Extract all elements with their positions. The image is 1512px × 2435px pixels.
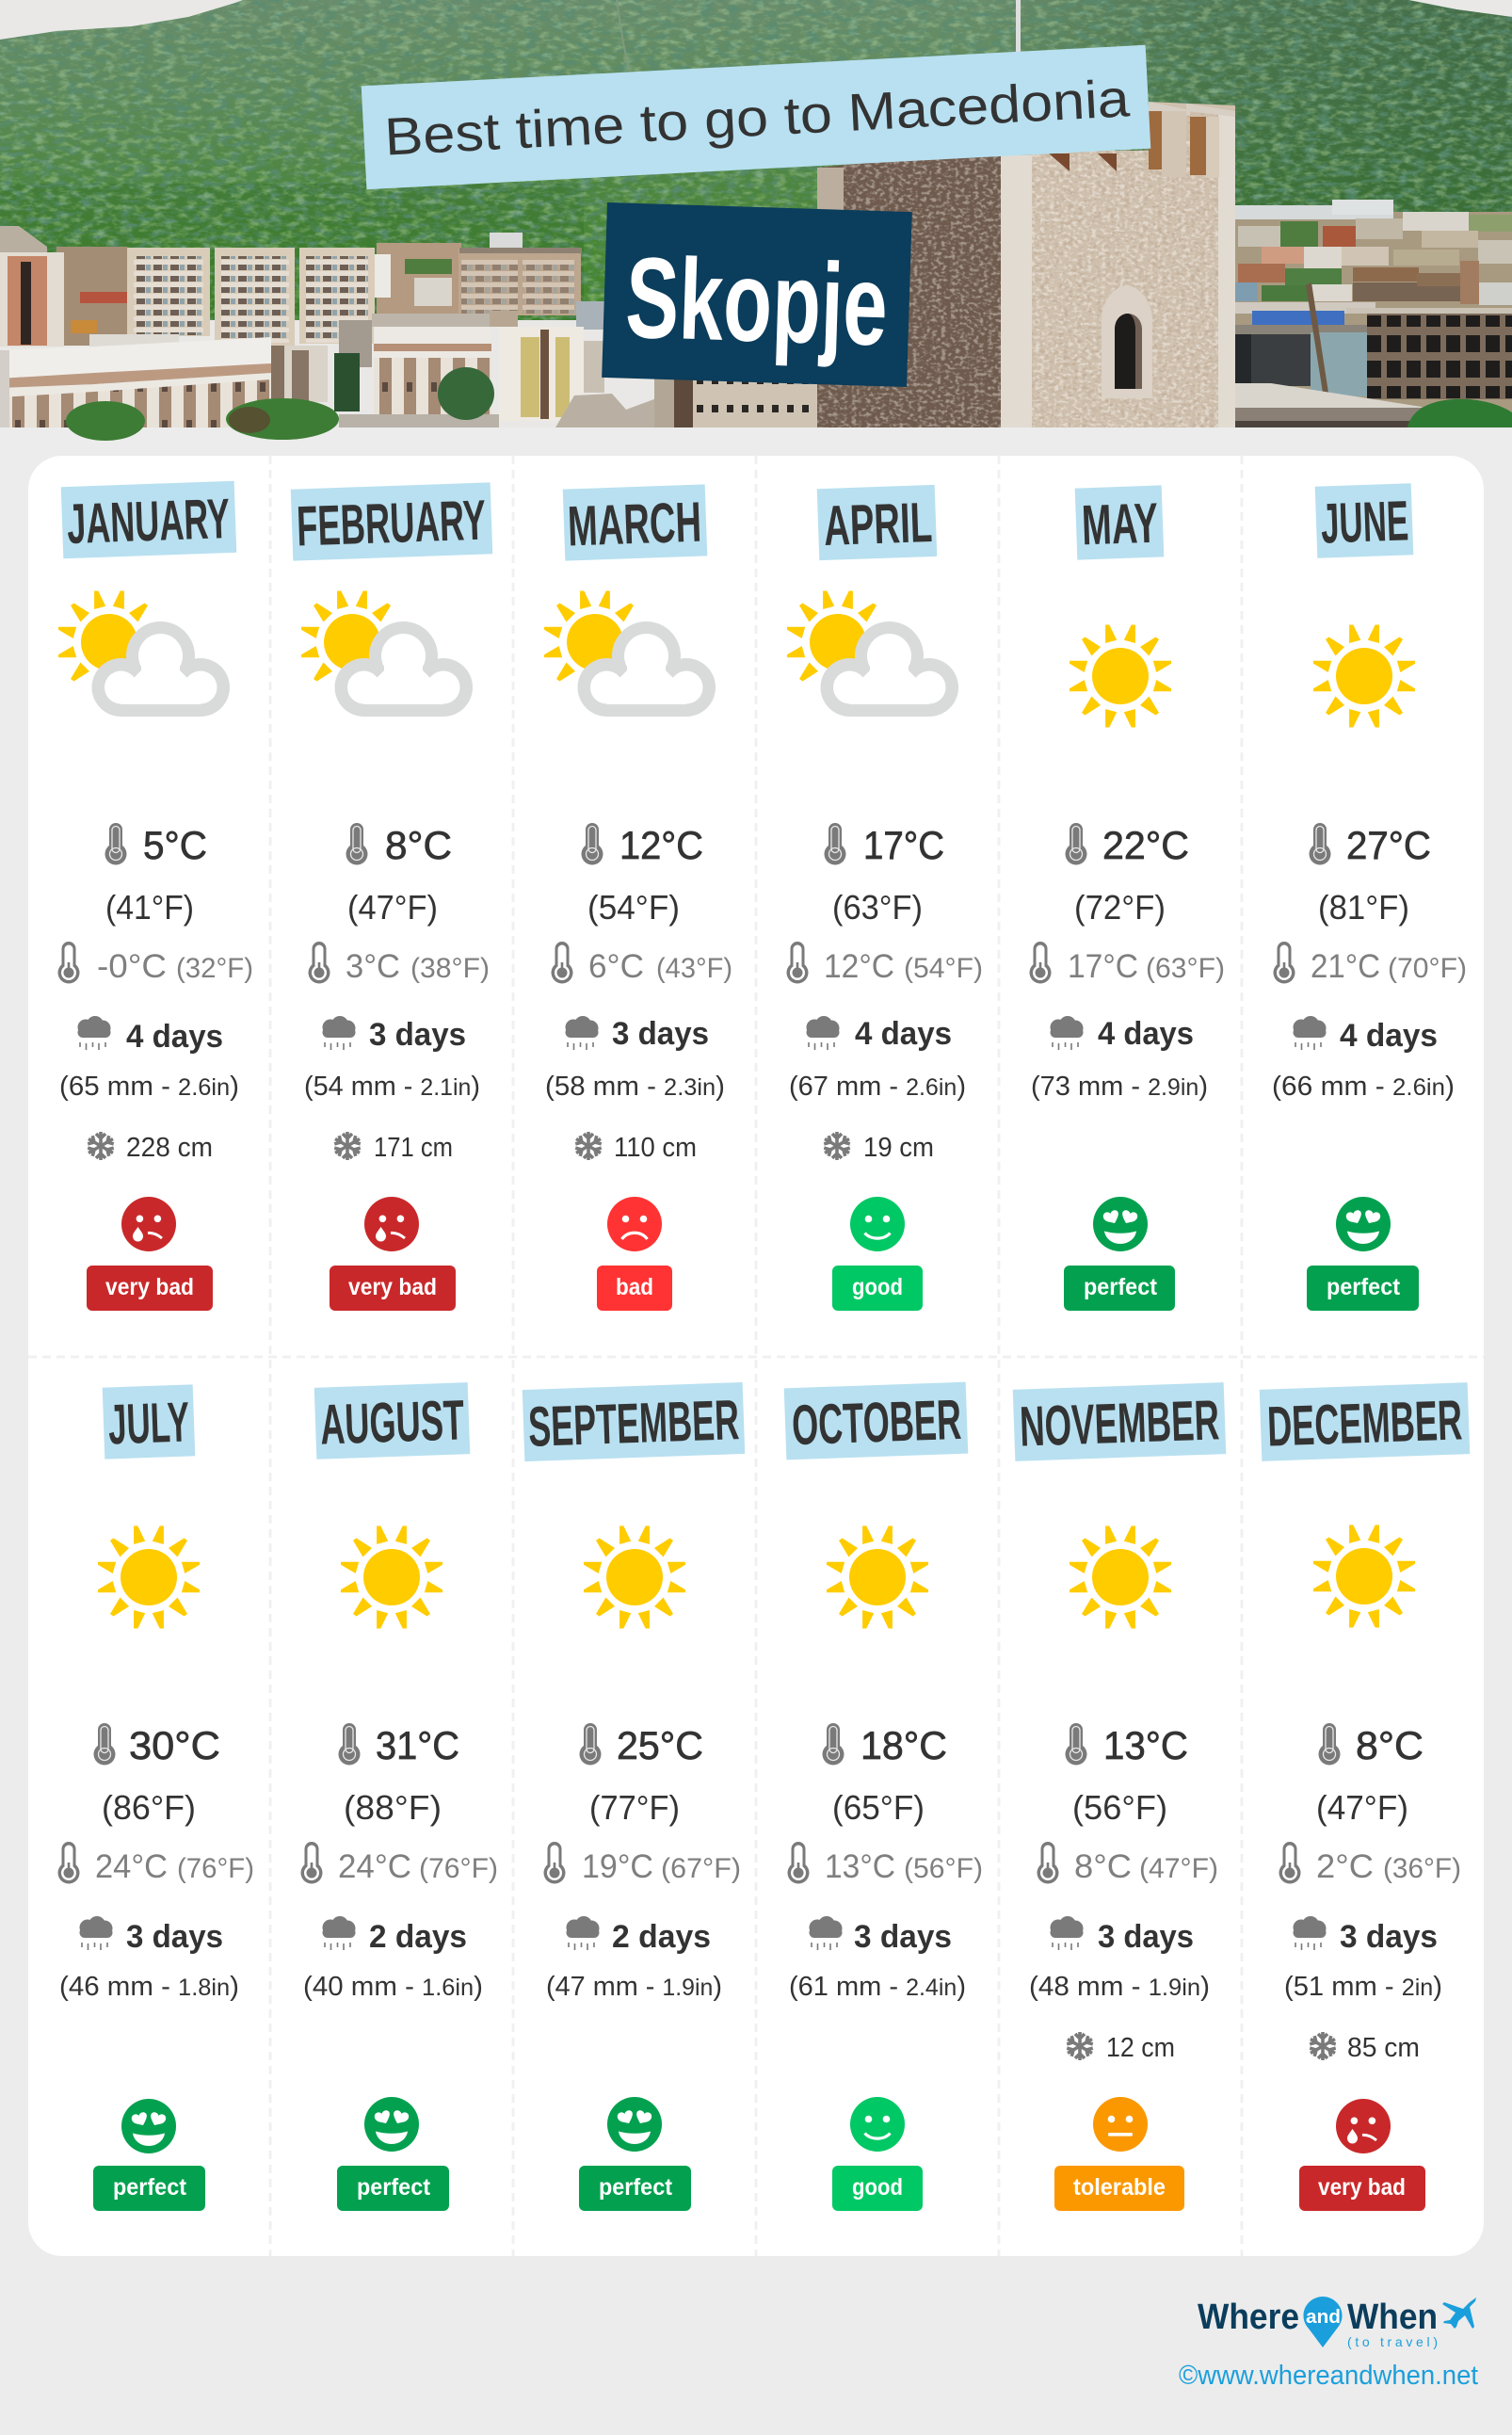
icon: thermometer — [582, 823, 603, 864]
panel: March — [544, 484, 732, 1311]
icon: low thermometer — [1037, 1842, 1058, 1883]
month label — [103, 1384, 195, 1459]
icon: thermometer — [825, 823, 845, 864]
rainfall: (73 mm - 2.9in) — [1031, 1072, 1208, 1102]
icon: low thermometer — [1279, 1842, 1301, 1883]
icon: plane — [1442, 2298, 1476, 2329]
low temperature: 8°C — [1074, 1848, 1132, 1885]
rating: good: good — [852, 2174, 903, 2201]
main card — [28, 456, 1484, 2256]
month label — [523, 1382, 745, 1461]
high temperature fahrenheit: (56°F) — [1072, 1788, 1167, 1827]
rainfall: (65 mm - 2.6in) — [59, 1072, 239, 1102]
high temperature: 31°C — [376, 1723, 459, 1767]
high temperature: 13°C — [1103, 1723, 1188, 1767]
icon: thermometer — [580, 1723, 601, 1765]
icon: low thermometer — [309, 942, 330, 983]
icon: sun — [98, 1525, 200, 1629]
logo: Where and When: Where — [1198, 2298, 1299, 2337]
icon: map pin — [1303, 2297, 1343, 2347]
snowfall: 19 cm — [863, 1133, 934, 1163]
rainfall: (47 mm - 1.9in) — [546, 1972, 722, 2002]
snowfall: 85 cm — [1347, 2033, 1420, 2063]
high temperature: 17°C — [863, 823, 944, 867]
rating: very bad — [87, 1266, 213, 1311]
logo: Where and When: (to travel) — [1347, 2334, 1438, 2349]
title banner — [362, 45, 1150, 189]
month label — [291, 482, 492, 561]
low temperature: 13°C — [825, 1848, 895, 1885]
rating: perfect: perfect — [113, 2174, 187, 2201]
rating: perfect: perfect — [357, 2174, 431, 2201]
low temperature: 6°C — [588, 948, 644, 985]
icon: snow — [1309, 2032, 1337, 2060]
high temperature fahrenheit: (81°F) — [1318, 888, 1409, 927]
panel: August — [301, 1382, 498, 2211]
icon: good face — [850, 2097, 905, 2152]
month label: NOVEMBER — [1019, 1388, 1220, 1459]
low temperature: 19°C — [582, 1848, 653, 1885]
high temperature fahrenheit: (77°F) — [589, 1788, 680, 1827]
high temperature fahrenheit: (65°F) — [832, 1788, 925, 1827]
month label: SEPTEMBER — [527, 1388, 740, 1459]
panel: October — [784, 1382, 983, 2211]
month label: FEBRUARY — [296, 489, 487, 558]
icon: thermometer — [1309, 823, 1331, 864]
icon: sun — [827, 1525, 928, 1629]
icon: thermometer — [1066, 1723, 1086, 1765]
icon: sun and cloud — [301, 591, 473, 717]
month label: MAY — [1081, 492, 1159, 556]
icon: rain — [1294, 1016, 1326, 1050]
low temperature fahrenheit: (76°F) — [419, 1853, 498, 1884]
rainfall: (58 mm - 2.3in) — [545, 1072, 725, 1102]
icon: low thermometer — [1030, 942, 1051, 983]
website credit: ©www.whereandwhen.net — [1179, 2361, 1478, 2391]
icon: bad face — [607, 1197, 662, 1251]
high temperature fahrenheit: (72°F) — [1074, 888, 1166, 927]
logo: Where and When: When — [1347, 2298, 1438, 2337]
high temperature: 8°C — [1356, 1723, 1424, 1767]
rating: perfect — [1307, 1266, 1419, 1311]
icon: thermometer — [339, 1723, 360, 1765]
low temperature fahrenheit: (32°F) — [176, 953, 253, 984]
rating: perfect: perfect — [1327, 1274, 1401, 1300]
month label: OCTOBER — [791, 1388, 962, 1457]
low temperature: 21°C — [1311, 948, 1380, 985]
low temperature: -0°C — [97, 948, 167, 985]
icon: rain — [322, 1016, 356, 1050]
month label: AUGUST — [319, 1388, 465, 1457]
rainy days: 2 days — [369, 1919, 467, 1955]
icon: thermometer — [105, 823, 126, 864]
icon: thermometer — [1318, 1723, 1341, 1765]
panel: June — [1272, 483, 1467, 1311]
rainfall: (40 mm - 1.6in) — [303, 1972, 483, 2002]
month label: JUNE — [1320, 489, 1409, 556]
rainy days: 3 days — [612, 1016, 709, 1052]
panel: November — [1013, 1382, 1226, 2211]
rainfall: (48 mm - 1.9in) — [1029, 1972, 1210, 2002]
icon: low thermometer — [787, 1842, 810, 1883]
rating: good — [832, 2166, 923, 2211]
high temperature fahrenheit: (41°F) — [105, 888, 194, 927]
icon: rain — [1051, 1916, 1083, 1950]
icon: sun — [1070, 1525, 1171, 1629]
left city blocks — [56, 247, 127, 346]
snowfall: 228 cm — [126, 1133, 213, 1163]
icon: low thermometer — [58, 1842, 79, 1883]
logo: Where and When — [1198, 2297, 1476, 2349]
high temperature fahrenheit: (54°F) — [587, 888, 680, 927]
rating: perfect: perfect — [599, 2174, 673, 2201]
header photo: Skopje with fortress tower — [0, 0, 1512, 441]
fortress tower — [817, 151, 1001, 427]
low temperature: 2°C — [1316, 1848, 1374, 1885]
low temperature fahrenheit: (47°F) — [1139, 1853, 1218, 1884]
icon: thermometer — [94, 1723, 115, 1765]
icon: sun and cloud — [787, 591, 958, 717]
icon: low thermometer — [58, 942, 79, 983]
rating: perfect — [579, 2166, 691, 2211]
rating: good: good — [852, 1274, 903, 1300]
icon: sun — [1313, 1525, 1415, 1627]
icon: low thermometer — [552, 942, 572, 983]
low temperature: 17°C — [1068, 948, 1138, 985]
rating: very bad: very bad — [348, 1274, 437, 1300]
rainy days: 3 days — [126, 1919, 223, 1955]
low temperature fahrenheit: (76°F) — [177, 1853, 254, 1884]
rating: very bad: very bad — [105, 1274, 194, 1300]
icon: rain — [565, 1016, 599, 1050]
icon: map pin: and — [1306, 2307, 1341, 2328]
rainy days: 4 days — [1098, 1016, 1194, 1052]
low temperature fahrenheit: (63°F) — [1146, 953, 1225, 984]
icon: thermometer — [823, 1723, 844, 1765]
icon: rain — [810, 1916, 842, 1950]
icon: perfect face — [1336, 1197, 1391, 1251]
city name box: Skopje — [624, 234, 890, 369]
snowfall: 110 cm — [614, 1133, 697, 1163]
low white buildings — [339, 320, 372, 367]
icon: low thermometer — [301, 1842, 322, 1883]
icon: rain — [1051, 1016, 1083, 1050]
icon: rain — [1294, 1916, 1326, 1950]
panel: September — [523, 1382, 745, 2211]
rating: perfect: perfect — [1084, 1274, 1158, 1300]
panel: February — [291, 482, 492, 1311]
rainy days: 4 days — [126, 1019, 223, 1055]
rainy days: 4 days — [855, 1016, 952, 1052]
rainfall: (54 mm - 2.1in) — [304, 1072, 480, 1102]
high temperature fahrenheit: (86°F) — [102, 1788, 196, 1827]
icon: sun — [341, 1525, 442, 1629]
rating: tolerable: tolerable — [1073, 2174, 1166, 2201]
high temperature: 5°C — [143, 823, 207, 867]
rating: good — [832, 1266, 923, 1311]
rainy days: 3 days — [854, 1919, 952, 1955]
low temperature fahrenheit: (43°F) — [656, 953, 732, 984]
high temperature fahrenheit: (47°F) — [347, 888, 438, 927]
high temperature: 22°C — [1102, 823, 1189, 867]
center buildings — [490, 311, 518, 327]
month label — [1075, 485, 1164, 560]
icon: perfect face — [607, 2097, 662, 2152]
icon: good face — [850, 1197, 905, 1251]
panel: July — [58, 1384, 254, 2211]
icon: low thermometer — [1273, 942, 1295, 983]
low temperature fahrenheit: (70°F) — [1388, 953, 1467, 984]
low temperature fahrenheit: (36°F) — [1383, 1853, 1461, 1884]
snowfall: 12 cm — [1106, 2033, 1175, 2063]
month label — [1013, 1382, 1226, 1461]
panel: April — [787, 485, 983, 1311]
month label — [563, 484, 707, 561]
high temperature fahrenheit: (47°F) — [1316, 1788, 1408, 1827]
icon: very bad face — [1336, 2099, 1391, 2153]
rating: perfect — [93, 2166, 205, 2211]
rainy days: 2 days — [612, 1919, 711, 1955]
icon: tolerable face — [1093, 2097, 1148, 2152]
icon: perfect face — [121, 2099, 176, 2153]
rating: very bad — [330, 1266, 456, 1311]
low temperature fahrenheit: (56°F) — [904, 1853, 983, 1884]
rating: tolerable — [1054, 2166, 1184, 2211]
city name box — [602, 202, 912, 387]
icon: sun — [1070, 625, 1171, 727]
icon: snow — [1066, 2032, 1094, 2060]
month label: MARCH — [567, 491, 702, 557]
icon: very bad face — [364, 1197, 419, 1251]
rainy days: 3 days — [369, 1017, 466, 1053]
month label — [817, 485, 937, 560]
icon: sun — [1313, 625, 1415, 727]
rainfall: (66 mm - 2.6in) — [1272, 1072, 1455, 1102]
low temperature fahrenheit: (38°F) — [410, 953, 490, 984]
icon: rain — [322, 1916, 356, 1950]
icon: perfect face — [364, 2097, 419, 2152]
snowfall: 171 cm — [374, 1133, 453, 1163]
low temperature: 24°C — [338, 1848, 411, 1885]
month label — [314, 1382, 470, 1459]
icon: snow — [823, 1132, 851, 1160]
icon: perfect face — [1093, 1197, 1148, 1251]
title banner: Best time to go to Macedonia — [383, 68, 1132, 167]
panel: December — [1260, 1382, 1470, 2211]
high temperature: 12°C — [619, 823, 703, 867]
low temperature: 12°C — [824, 948, 894, 985]
rainfall: (51 mm - 2in) — [1284, 1972, 1442, 2002]
rating: perfect — [337, 2166, 449, 2211]
rainy days: 4 days — [1340, 1018, 1438, 1054]
icon: rain — [77, 1016, 111, 1050]
rating: very bad — [1299, 2166, 1425, 2211]
rating: perfect — [1064, 1266, 1175, 1311]
high temperature fahrenheit: (88°F) — [344, 1788, 442, 1827]
high temperature: 25°C — [617, 1723, 703, 1767]
icon: rain — [79, 1916, 113, 1950]
icon: snow — [87, 1132, 115, 1160]
high temperature: 8°C — [385, 823, 452, 867]
icon: snow — [333, 1132, 362, 1160]
panel: January — [58, 481, 253, 1311]
rainy days: 3 days — [1340, 1919, 1438, 1955]
high temperature: 27°C — [1346, 823, 1431, 867]
rainfall: (61 mm - 2.4in) — [789, 1972, 966, 2002]
icon: snow — [574, 1132, 603, 1160]
icon: sun — [584, 1525, 685, 1629]
icon: thermometer — [346, 823, 367, 864]
hillside town — [1234, 212, 1512, 427]
icon: rain — [567, 1916, 599, 1950]
month label: JANUARY — [66, 487, 231, 556]
high temperature fahrenheit: (63°F) — [832, 888, 923, 927]
month label — [61, 481, 236, 558]
rating: bad: bad — [616, 1274, 653, 1300]
panel: May — [1030, 485, 1225, 1311]
low temperature fahrenheit: (54°F) — [904, 953, 983, 984]
month label — [1315, 483, 1413, 558]
high temperature: 30°C — [129, 1723, 220, 1767]
low temperature: 3°C — [346, 948, 400, 985]
rainy days: 3 days — [1098, 1919, 1194, 1955]
month label — [784, 1382, 968, 1459]
icon: rain — [806, 1016, 840, 1050]
rating: bad — [597, 1266, 672, 1311]
low temperature: 24°C — [95, 1848, 168, 1885]
rating: very bad: very bad — [1318, 2174, 1406, 2201]
icon: thermometer — [1066, 823, 1086, 864]
icon: sun and cloud — [58, 591, 230, 717]
rainfall: (46 mm - 1.8in) — [59, 1972, 239, 2002]
icon: low thermometer — [544, 1842, 565, 1883]
icon: sun and cloud — [544, 591, 716, 717]
month label: JULY — [107, 1391, 190, 1456]
high temperature: 18°C — [861, 1723, 947, 1767]
low temperature fahrenheit: (67°F) — [661, 1853, 741, 1884]
icon: low thermometer — [787, 942, 808, 983]
icon: very bad face — [121, 1197, 176, 1251]
rainfall: (67 mm - 2.6in) — [789, 1072, 966, 1102]
month label: APRIL — [823, 491, 933, 557]
